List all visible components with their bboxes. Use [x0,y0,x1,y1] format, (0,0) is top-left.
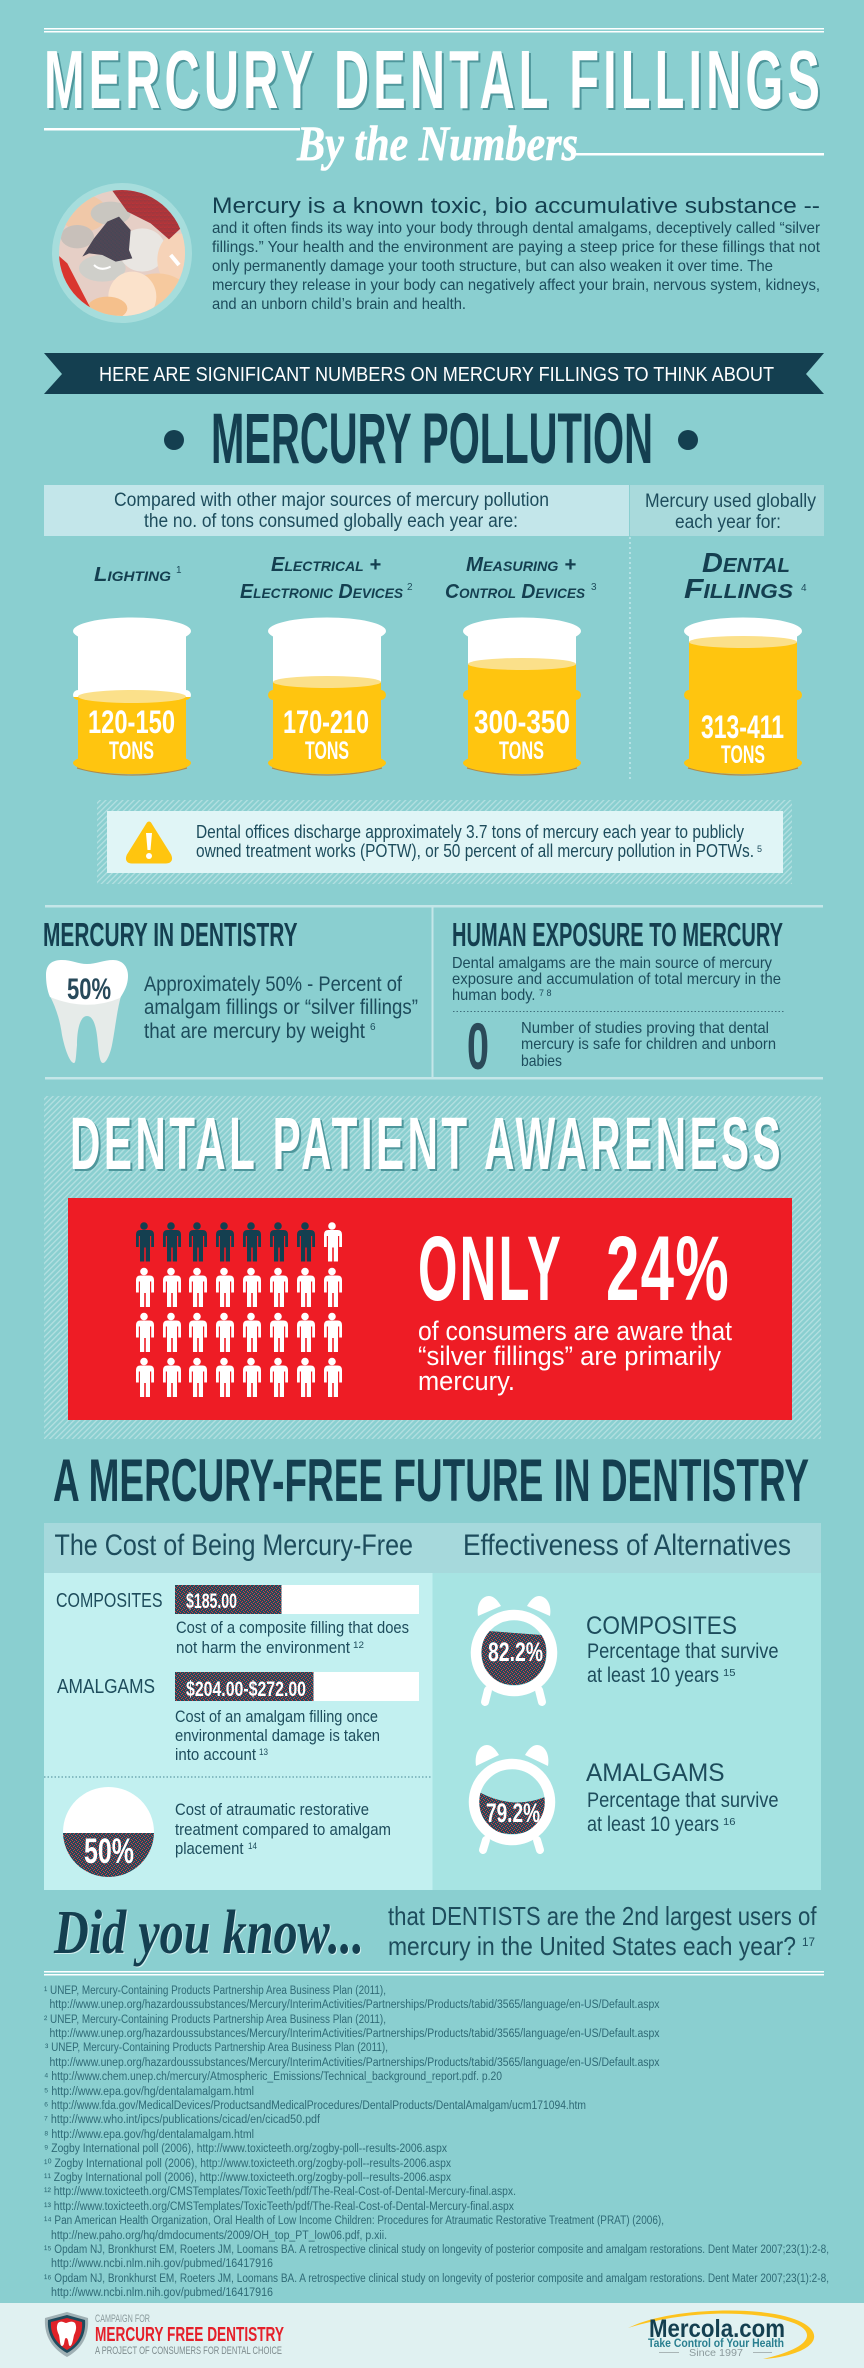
barrel: dental fillings 313-411 tons: 313-411 [701,709,784,745]
panel: human exposure to mercury: Number of studies proving that dental [521,1020,769,1037]
campaign wordmark: MERCURY FREE DENTISTRY [95,2324,284,2346]
references: ⁹ Zogby International poll (2006), http://www.toxicteeth.org/zogby-poll--results-2006.aspx [44,2143,447,2155]
label: dental fillings: Fillings [684,573,794,604]
bar: amalgams cost: into account [175,1745,256,1764]
bar: composites cost: $185.00 [186,1590,237,1613]
statistic caption: “silver fillings” are primarily [418,1341,721,1371]
icon: clock 79.2% [474,1745,550,1850]
label: measuring and control devices: Control Devices [445,581,586,603]
panel: cost of being mercury-free: placement [175,1839,244,1858]
photo: decayed tooth [52,183,197,323]
ribbon banner: HERE ARE SIGNIFICANT NUMBERS ON MERCURY FILLINGS TO THINK ABOUT [99,364,774,386]
barrel: lighting 120-150 tons: 120-150 [88,704,175,740]
references: http://www.unep.org/hazardoussubstances/Mercury/InterimActivities/Partnerships/Products/tabid/3565/language/en-US/Default.aspx [50,2057,660,2069]
panel: human exposure to mercury: mercury is safe for children and unborn [521,1036,776,1053]
barrel: measuring 300-350 tons: 300-350 [474,704,570,740]
barrel: measuring 300-350 tons [462,615,582,775]
panel: mercury in dentistry: Approximately 50% - Percent of [144,973,402,996]
statistic caption: of consumers are aware that [418,1316,732,1346]
references: ¹ UNEP, Mercury-Containing Products Partnership Area Business Plan (2011), [44,1985,386,1997]
panel: human exposure to mercury: babies [521,1053,562,1070]
header: mercury used globally: Mercury used globally [645,491,816,512]
did you know fact: mercury in the United States each year? [388,1931,796,1961]
intro text: Mercury is a known toxic, bio accumulative substance -- [212,193,820,218]
intro text: only permanently damage your tooth structure, but can also weaken it over time. The [212,258,773,275]
references: ⁵ http://www.epa.gov/hg/dentalamalgam.html [44,2086,254,2098]
did you know fact [388,1901,817,1961]
panel: effectiveness of alternatives: Percentage that survive [587,1640,778,1663]
campaign wordmark: A PROJECT OF CONSUMERS FOR DENTAL CHOICE [95,2345,282,2357]
statistic caption: mercury. [418,1366,515,1396]
barrel: electrical 170-210 tons [267,615,387,775]
did you know heading: Did you know... [53,1899,364,1967]
panel: dental patient awareness [44,1096,821,1439]
panel: mercury in dentistry: 6 [370,1022,376,1033]
icon: clock 82.2%: 82.2% [488,1637,543,1667]
panel: effectiveness of alternatives: at least 10 years [587,1813,719,1836]
callout: POTW discharge: Dental offices discharge approximately 3.7 tons of mercury each year to publicly [196,822,744,842]
panel: human exposure to mercury: 7 8 [539,988,552,998]
label: electrical and electronic devices: 2 [407,582,413,593]
barrel: lighting 120-150 tons: TONS [109,737,154,765]
campaign wordmark: CAMPAIGN FOR [95,2313,150,2325]
logo: campaign shield [45,2312,88,2357]
panel: effectiveness of alternatives: 16 [723,1817,736,1828]
bar: composites cost: not harm the environment [176,1638,350,1657]
bar: composites cost: 12 [353,1640,364,1650]
logo: Mercola.com [628,2311,814,2359]
footer [0,2303,864,2368]
header: comparison sources [44,485,629,536]
statistic: only 24%: 24% [606,1218,730,1320]
references: ¹¹ Zogby International poll (2006), http://www.toxicteeth.org/zogby-poll--results-2006.aspx [44,2172,451,2184]
references: ⁸ http://www.epa.gov/hg/dentalamalgam.html [44,2129,254,2141]
did you know fact: 17 [802,1935,815,1949]
label: lighting: 1 [176,565,182,576]
references: http://new.paho.org/hq/dmdocuments/2009/OH_top_PT_low06.pdf, p.xii. [51,2230,387,2242]
header: mercury used globally [630,485,824,536]
icon: warning triangle [128,824,170,861]
references: ⁴ http://www.chem.unep.ch/mercury/Atmospheric_Emissions/Technical_background_report.pdf. p.20 [44,2071,502,2083]
bar: amalgams cost [57,1672,419,1764]
label: electrical and electronic devices: Electronic Devices [240,581,404,603]
panel: effectiveness of alternatives: 15 [723,1668,736,1679]
callout: POTW discharge [97,800,792,884]
panel: effectiveness of alternatives [432,1523,821,1890]
label: measuring and control devices [445,554,597,603]
references [44,1985,829,2299]
references: ¹² http://www.toxicteeth.org/CMSTemplates/ToxicTeeth/pdf/The-Real-Cost-of-Dental-Mercury-final.aspx. [44,2186,516,2198]
intro text [212,193,821,313]
icon: tooth with 50%: 50% [67,973,111,1006]
panel: effectiveness of alternatives: Effectiveness of Alternatives [463,1529,791,1562]
barrel: dental fillings 313-411 tons [683,615,803,775]
label: lighting: Lighting [94,564,171,586]
panel: effectiveness of alternatives: at least 10 years [587,1664,719,1687]
references: ⁶ http://www.fda.gov/MedicalDevices/ProductsandMedicalProcedures/DentalProducts/DentalAmalgam/ucm171094.htm [44,2100,586,2112]
logo: Mercola.com: Take Control of Your Health [648,2336,784,2350]
panel: cost of being mercury-free: 14 [248,1841,257,1851]
double rule above references [44,1971,824,1976]
bar: amalgams cost: $204.00-$272.00 [186,1678,306,1701]
references: http://www.unep.org/hazardoussubstances/Mercury/InterimActivities/Partnerships/Products/tabid/3565/language/en-US/Default.aspx [50,2028,660,2040]
bar: amalgams cost: Cost of an amalgam filling once [175,1707,378,1726]
barrel: measuring 300-350 tons: TONS [499,737,544,765]
icon: tooth with 50% [46,960,128,1063]
subtitle with flanking rules: By the Numbers [296,115,578,171]
label: electrical and electronic devices: Electrical + [271,554,381,576]
panel: cost of being mercury-free: Cost of atraumatic restorative [175,1800,369,1819]
label: dental fillings: Dental [702,547,790,578]
chart: 50% semicircle: 50% [84,1832,134,1871]
icon: clock 82.2% [476,1596,552,1702]
bar: amalgams cost: environmental damage is taken [175,1726,380,1745]
bar: composites cost [56,1585,419,1657]
panel: human exposure to mercury [452,916,785,1083]
barrel: dental fillings 313-411 tons: TONS [721,741,765,769]
label: dental fillings [684,547,807,604]
red card [68,1198,792,1420]
intro text: and it often finds its way into your body through dental amalgams, deceptively called “silver [212,220,821,237]
statistic caption [418,1316,732,1396]
panel: mercury in dentistry: MERCURY IN DENTISTRY [43,916,298,953]
label: measuring and control devices: 3 [591,582,597,593]
header: mercury used globally: each year for: [675,512,781,533]
callout: POTW discharge: owned treatment works (POTW), or 50 percent of all mercury pollution in POTWs. [196,841,754,861]
references: ² UNEP, Mercury-Containing Products Partnership Area Business Plan (2011), [44,2014,386,2026]
references: ¹⁰ Zogby International poll (2006), http://www.toxicteeth.org/zogby-poll--results-2006.aspx [44,2158,451,2170]
label: electrical and electronic devices [240,554,413,603]
logo: Mercola.com: Since 1997 [689,2348,743,2359]
header: comparison sources: Compared with other major sources of mercury pollution [114,490,549,511]
pictogram: 7 of 32 people dark [136,1222,342,1397]
panel: human exposure to mercury: 0 [467,1009,489,1083]
label: measuring and control devices: Measuring + [466,554,576,576]
header: comparison sources: the no. of tons consumed globally each year are: [144,511,518,532]
bar: amalgams cost: AMALGAMS [57,1676,155,1698]
barrel: electrical 170-210 tons: 170-210 [283,704,369,740]
barrel: lighting 120-150 tons [72,615,192,775]
panel: mercury in dentistry [43,916,418,1063]
references: http://www.unep.org/hazardoussubstances/Mercury/InterimActivities/Partnerships/Products/tabid/3565/language/en-US/Default.aspx [50,1999,660,2011]
panel: mercury in dentistry: that are mercury by weight [144,1020,365,1043]
logo: Mercola.com: Mercola.com [649,2315,785,2343]
dotted divider [629,537,631,780]
intro text: fillings.” Your health and the environment are paying a steep price for these fillings that not [212,239,821,256]
panel: cost of being mercury-free: The Cost of Being Mercury-Free [54,1529,413,1562]
references: ⁷ http://www.who.int/ipcs/publications/cicad/en/cicad50.pdf [44,2114,321,2126]
header double rule [44,28,824,32]
panel: cost of being mercury-free [44,1523,432,1890]
barrel: electrical 170-210 tons: TONS [305,737,349,765]
panel: effectiveness of alternatives: COMPOSITES [586,1612,737,1640]
divider frame [45,905,823,1080]
chart: 50% semicircle [63,1787,154,1877]
section heading: mercury pollution [164,400,698,479]
references: ³ UNEP, Mercury-Containing Products Partnership Area Business Plan (2011), [45,2042,388,2054]
statistic: only 24%: ONLY [418,1218,563,1320]
panel: human exposure to mercury: Dental amalgams are the main source of mercury [452,955,772,972]
references: http://www.ncbi.nlm.nih.gov/pubmed/16417916 [51,2258,273,2270]
panel: effectiveness of alternatives: AMALGAMS [586,1759,724,1787]
intro text: mercury they release in your body can negatively affect your brain, nervous system, kidneys, [212,277,820,294]
bar: amalgams cost: 13 [259,1747,268,1757]
bar: composites cost: COMPOSITES [56,1590,162,1612]
panel: human exposure to mercury: exposure and accumulation of total mercury in the [452,971,781,988]
bar: composites cost: Cost of a composite filling that does [176,1618,409,1637]
panel: effectiveness of alternatives: Percentage that survive [587,1789,778,1812]
ribbon banner [44,353,824,394]
panel: mercury in dentistry: amalgam fillings or “silver fillings” [144,996,418,1019]
label: dental fillings: 4 [801,583,807,594]
callout: POTW discharge: 5 [757,844,762,854]
references: ¹⁴ Pan American Health Organization, Oral Health of Low Income Children: Procedures for Atraumatic Restorative Treatment (PRAT) (2006), [44,2215,664,2227]
panel: human exposure to mercury: human body. [452,987,536,1004]
references: http://www.ncbi.nlm.nih.gov/pubmed/16417916 [51,2287,273,2299]
intro text: and an unborn child’s brain and health. [212,296,466,313]
icon: clock 79.2%: 79.2% [486,1798,540,1828]
references: ¹³ http://www.toxicteeth.org/CMSTemplates/ToxicTeeth/pdf/The-Real-Cost-of-Dental-Mercury-final.aspx [44,2201,514,2213]
campaign wordmark [95,2313,284,2357]
panel: cost of being mercury-free: treatment compared to amalgam [175,1820,391,1839]
